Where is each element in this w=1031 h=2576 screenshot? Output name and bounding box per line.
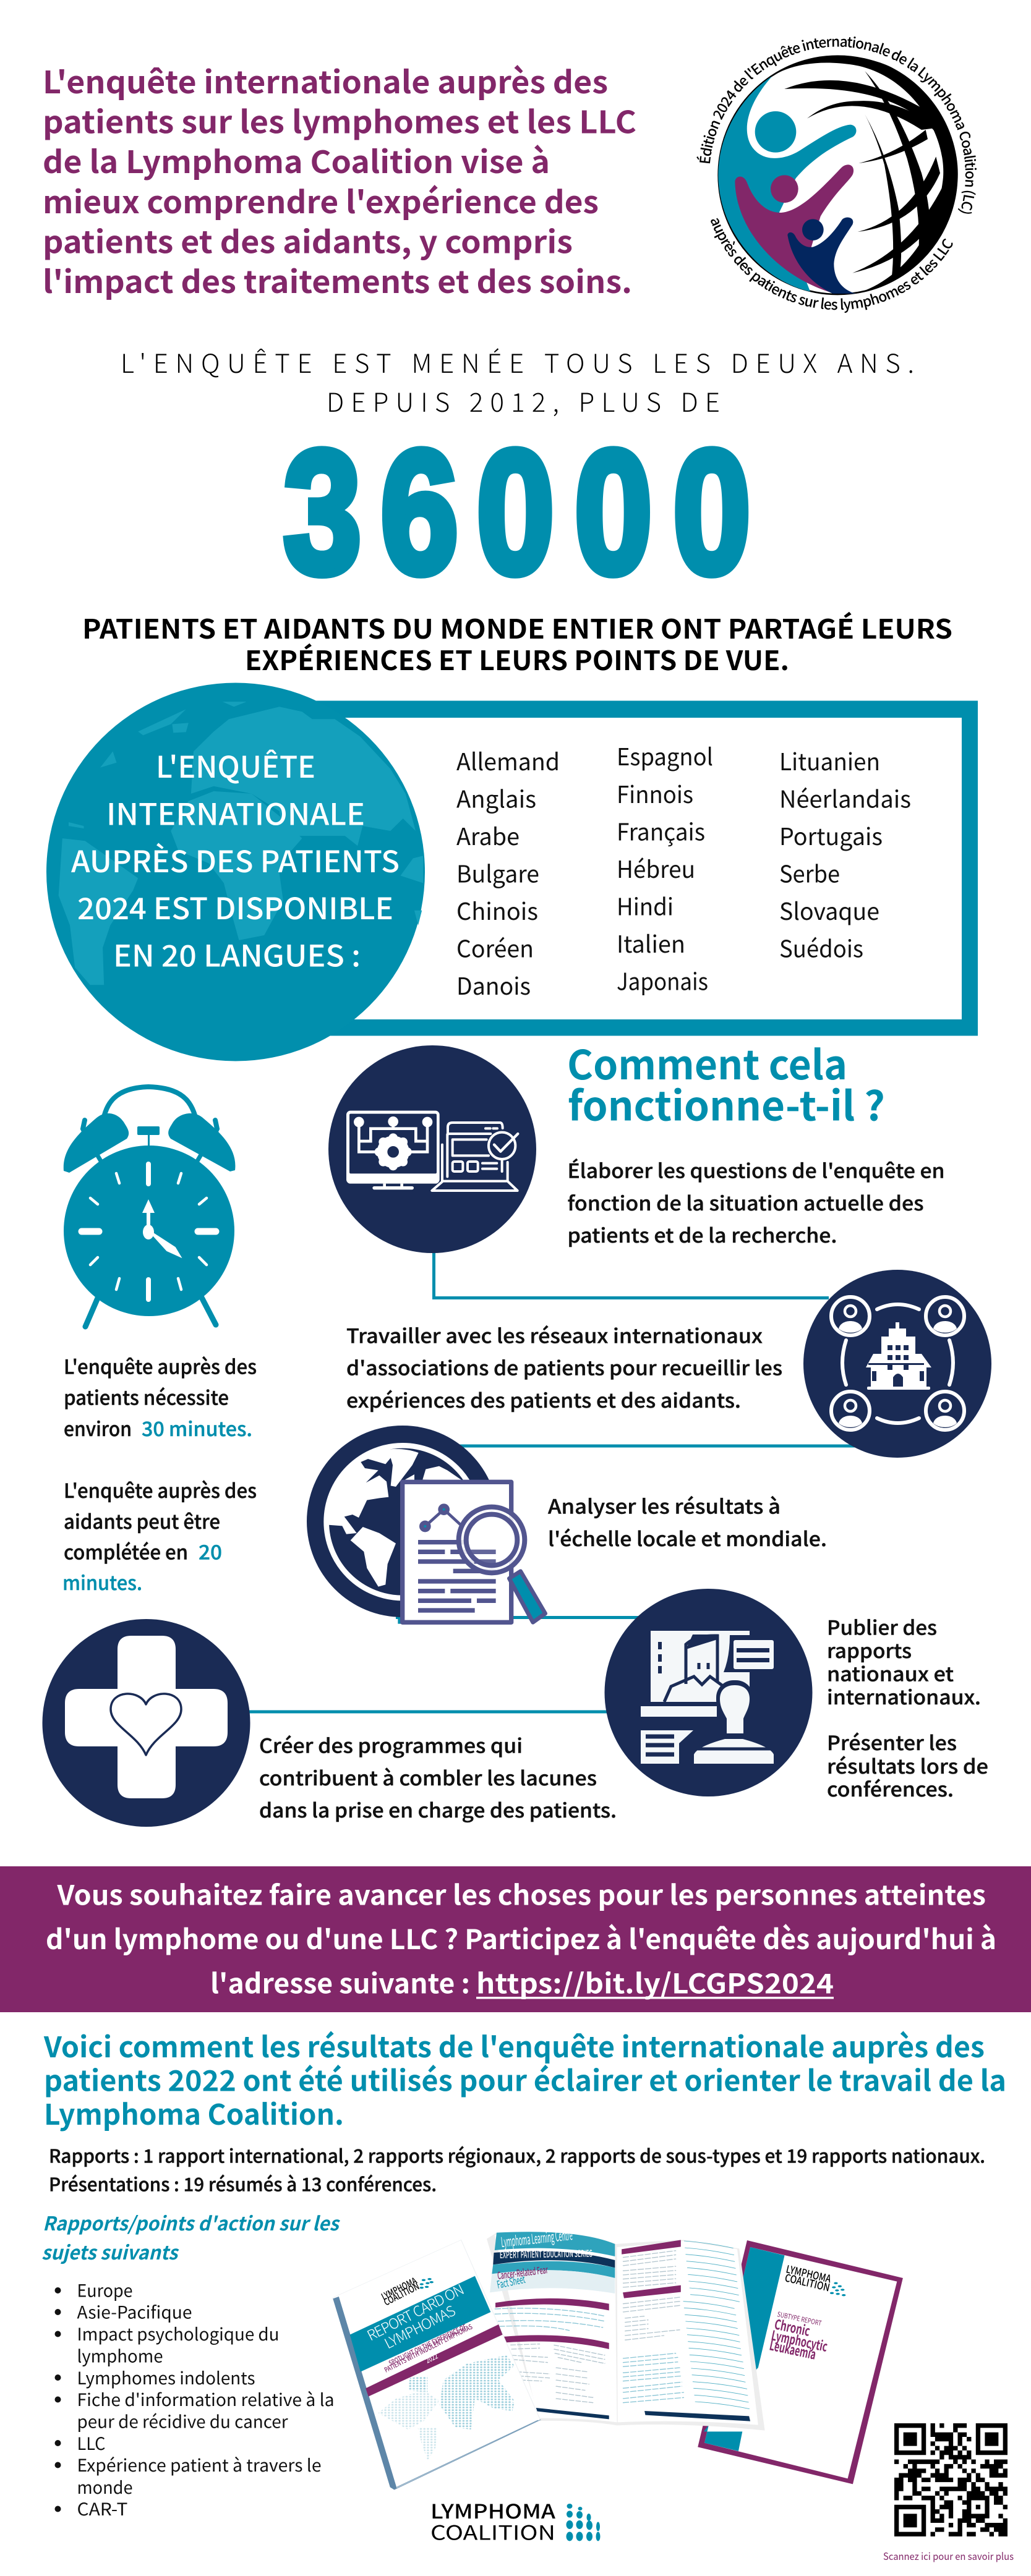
globe heading (71, 743, 400, 976)
step 4 text (827, 1612, 988, 1803)
brochure: subtype report: COALITION (784, 2269, 832, 2295)
title intro text (43, 58, 636, 302)
title intro text: l'impact des traitements et des soins. (43, 258, 632, 302)
language column 1: Allemand (456, 743, 560, 777)
globe heading: AUPRÈS DES PATIENTS (71, 838, 400, 881)
text: caregiver survey duration (62, 1476, 257, 1596)
step 2 text: Travailler avec les réseaux internationaux (346, 1320, 763, 1349)
icon: alarm clock (64, 1087, 235, 1327)
patients statement: PATIENTS ET AIDANTS DU MONDE ENTIER ONT PARTAGÉ LEURS (82, 608, 952, 647)
outputs summary: Présentations : 19 résumés à 13 conférences. (49, 2170, 437, 2197)
languages frame (278, 701, 978, 1036)
call to action banner: Vous souhaitez faire avancer les choses pour les personnes atteintes (56, 1873, 986, 1913)
text: patient survey duration: patients nécessite (64, 1382, 229, 1411)
language column 2: Hindi (617, 888, 674, 922)
survey edition logo: auprès des patients sur les lymphomes et les LLC (711, 218, 952, 313)
bullet list of topics: Asie-Pacifique (77, 2300, 192, 2324)
language column 1 (456, 743, 560, 1001)
step 5 text (259, 1731, 617, 1824)
brochure: fact sheet: Lymphoma Learning Centre (500, 2224, 573, 2251)
heading: how it works: fonctionne-t-il ? (568, 1074, 885, 1133)
language column 2: Espagnol (617, 738, 713, 772)
bullet list of topics: Fiche d'information relative à la (77, 2387, 334, 2412)
language column 1: Bulgare (456, 856, 539, 889)
panel: languages (46, 682, 978, 1061)
call to action banner (0, 1866, 1031, 2012)
step 4 text: conférences. (827, 1774, 954, 1803)
brochure: fact sheet: EXPERT PATIENT EDUCATION SERIES (500, 2247, 593, 2261)
step 3 text (548, 1491, 827, 1552)
results heading (43, 2025, 1006, 2133)
big number 36000: 36000 (283, 415, 751, 610)
language column 2: Français (617, 814, 705, 847)
text: caregiver survey duration: L'enquête auprès des (64, 1476, 257, 1504)
brochure: subtype report: Chronic (773, 2314, 812, 2340)
brochure: report card cover: PATIENTS WITH INDOLENT LYMPHOMAS (383, 2321, 474, 2375)
language column 1: Arabe (456, 818, 520, 852)
bullet list of topics: Europe (77, 2277, 132, 2302)
Lymphoma Coalition logo: LYMPHOMA (430, 2496, 555, 2525)
globe heading: 2024 EST DISPONIBLE (77, 885, 393, 928)
title intro text: mieux comprendre l'expérience des (43, 178, 599, 223)
bullet list of topics: Lymphomes indolents (77, 2365, 255, 2390)
bullet list of topics: LLC (77, 2431, 105, 2455)
step 2 text (346, 1320, 782, 1414)
text: patient survey duration: 30 minutes. (142, 1414, 252, 1442)
text: patient survey duration: environ (64, 1414, 132, 1442)
brochure: fact sheet (487, 2224, 765, 2431)
language column 2: Italien (617, 925, 685, 959)
call to action banner: https://bit.ly/LCGPS2024 (476, 1962, 834, 2002)
language column 3 (779, 743, 911, 964)
brochure: subtype report: SUBTYPE REPORT (776, 2309, 823, 2328)
step 4 text: nationaux et (827, 1659, 954, 1688)
step 4 text: Publier des (827, 1612, 937, 1641)
language column 3: Slovaque (779, 893, 879, 927)
bullet list of topics: Expérience patient à travers le (77, 2452, 322, 2477)
bullet list of topics: CAR-T (77, 2496, 127, 2521)
frequency statement (121, 343, 914, 420)
QR code (894, 2423, 1007, 2536)
brochure: fact sheet: Fact Sheet (495, 2271, 526, 2292)
brochure: report card cover: REPORT CARD ON (363, 2278, 467, 2345)
language column 1: Chinois (456, 893, 538, 927)
heading: how it works (567, 1033, 885, 1133)
brochure: report card cover: COALITION (382, 2280, 422, 2308)
step 1 text (568, 1156, 945, 1249)
step 1 text: patients et de la recherche. (568, 1220, 837, 1249)
subheading: reports topics: sujets suivants (41, 2237, 180, 2265)
step 1 icon: design questions (328, 1045, 536, 1253)
results heading: patients 2022 ont été utilisés pour éclairer et orienter le travail de la (44, 2059, 1006, 2099)
language column 3: Néerlandais (779, 780, 911, 815)
Lymphoma Coalition logo (430, 2496, 600, 2546)
outputs summary: Rapports : 1 rapport international, 2 rapports régionaux, 2 rapports de sous-types et 19 rapports nationaux. (49, 2141, 985, 2169)
brochure: subtype report (698, 2240, 903, 2484)
results heading: Lymphoma Coalition. (44, 2093, 344, 2133)
language column 2 (617, 738, 713, 997)
title intro text: patients sur les lymphomes et les LLC (43, 98, 636, 142)
brochure: fact sheet: Cancer-Related Fear (497, 2261, 549, 2282)
bullet list of topics: peur de récidive du cancer (77, 2408, 288, 2433)
language column 1: Danois (456, 967, 531, 1001)
text: patient survey duration: L'enquête auprès des (64, 1351, 257, 1380)
step 5 text: Créer des programmes qui (259, 1731, 523, 1759)
connector lines (244, 1249, 860, 1712)
title intro text: patients et des aidants, y compris (43, 218, 573, 262)
bullet list of topics: Impact psychologique du (77, 2321, 280, 2346)
step 5 text: dans la prise en charge des patients. (259, 1795, 617, 1824)
text: caregiver survey duration: complétée en (64, 1537, 188, 1565)
subheading: reports topics (41, 2208, 341, 2265)
brochure: report card cover (333, 2240, 541, 2489)
brochure: subtype report: Leukaemia (768, 2335, 818, 2364)
language column 3: Serbe (779, 856, 840, 889)
title intro text: L'enquête internationale auprès des (43, 58, 608, 103)
brochure: report card cover: LYMPHOMAS (380, 2299, 459, 2353)
outputs summary (49, 2141, 985, 2197)
patients statement: EXPÉRIENCES ET LEURS POINTS DE VUE. (245, 640, 789, 678)
globe heading: INTERNATIONALE (106, 790, 365, 833)
step 2 icon: patient networks (803, 1270, 991, 1458)
bullet list of topics (54, 2277, 334, 2521)
language column 2: Japonais (617, 963, 708, 997)
step 3 icon: globe and report (307, 1426, 545, 1624)
text: caregiver survey duration: aidants peut être (64, 1507, 220, 1535)
call to action banner: d'un lymphome ou d'une LLC ? Participez à l'enquête dès aujourd'hui à (46, 1918, 996, 1957)
brochure: report card cover: 2022 (424, 2351, 440, 2366)
step 4 text: internationaux. (827, 1682, 981, 1711)
brochure: report card cover: LYMPHOMA (379, 2274, 419, 2303)
frequency statement: DEPUIS 2012, PLUS DE (327, 382, 720, 420)
heading: how it works: Comment cela (567, 1033, 847, 1091)
text: patient survey duration (64, 1351, 257, 1442)
brochure: report card cover: SPOTLIGHT ON THE EXPERIENCE OF (387, 2322, 468, 2368)
QR caption: Scannez ici pour en savoir plus (883, 2548, 1014, 2563)
text: caregiver survey duration: 20 (199, 1537, 222, 1565)
language column 2: Finnois (617, 776, 693, 810)
call to action banner: l'adresse suivante : (210, 1962, 470, 2002)
step 3 text: Analyser les résultats à (548, 1491, 781, 1520)
report brochures (333, 2224, 903, 2489)
language column 3: Suédois (779, 930, 863, 964)
text: caregiver survey duration: minutes. (62, 1568, 142, 1596)
brochure: subtype report: Lymphocytic (770, 2325, 829, 2356)
bullet list of topics: monde (77, 2475, 132, 2499)
frequency statement: L'ENQUÊTE EST MENÉE TOUS LES DEUX ANS. (121, 343, 914, 381)
globe badge (46, 682, 425, 1061)
step 5 icon: heart cross (42, 1619, 250, 1827)
language column 2: Hébreu (617, 851, 695, 885)
language column 1: Coréen (456, 930, 534, 964)
title intro text: de la Lymphoma Coalition vise à (43, 138, 550, 182)
bullet list of topics: lymphome (77, 2343, 163, 2368)
results heading: Voici comment les résultats de l'enquête internationale auprès des (43, 2025, 985, 2066)
step 4 icon: presenter (605, 1589, 813, 1796)
subheading: reports topics: Rapports/points d'action sur les (43, 2208, 341, 2236)
survey edition logo (696, 36, 977, 313)
language column 3: Portugais (779, 818, 883, 852)
globe heading: EN 20 LANGUES : (113, 932, 361, 976)
step 2 text: expériences des patients et des aidants. (346, 1385, 741, 1414)
step 1 text: fonction de la situation actuelle des (568, 1188, 924, 1217)
step 4 text: rapports (827, 1636, 912, 1664)
globe heading: L'ENQUÊTE (156, 743, 315, 786)
patients statement (82, 608, 952, 678)
survey edition logo: Édition 2024 de l'Enquête internationale de la Lymphoma Coalition (LC) (696, 36, 977, 214)
step 3 text: l'échelle locale et mondiale. (548, 1524, 827, 1552)
step 4 text: Présenter les (827, 1728, 957, 1756)
brochure: subtype report: LYMPHOMA (785, 2261, 833, 2286)
step 5 text: contribuent à combler les lacunes (259, 1763, 597, 1792)
step 4 text: résultats lors de (827, 1751, 988, 1780)
step 2 text: d'associations de patients pour recueillir les (346, 1353, 782, 1381)
language column 1: Anglais (456, 780, 536, 815)
language column 3: Lituanien (779, 743, 880, 777)
step 1 text: Élaborer les questions de l'enquête en (568, 1156, 945, 1184)
Lymphoma Coalition logo: COALITION (430, 2517, 555, 2546)
